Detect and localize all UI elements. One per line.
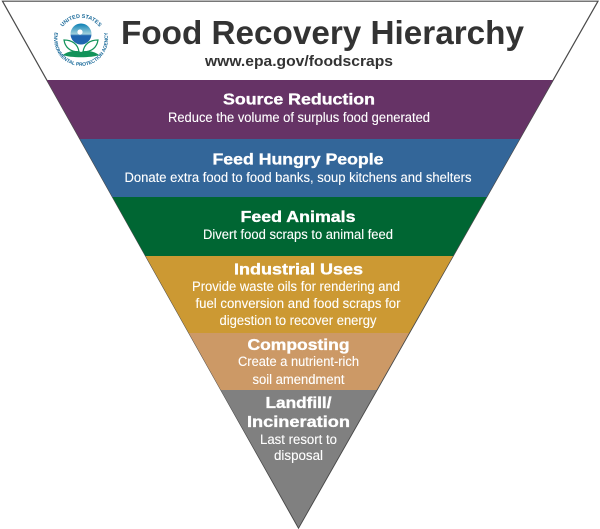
panel: feed hungry people: [80, 139, 520, 197]
heading: landfill / incineration: [247, 395, 350, 431]
icon: EPA seal: UNITED STATES: [60, 14, 102, 26]
panel: landfill / incineration: [221, 390, 377, 527]
heading: feed animals: Feed Animals: [240, 209, 356, 226]
text: landfill description: [260, 432, 337, 463]
heading: source reduction: Source Reduction: [223, 92, 375, 108]
text: composting description: [238, 354, 359, 387]
icon: EPA seal: ENVIRONMENTAL PROTECTION AGENCY: [54, 32, 108, 66]
text: industrial uses description: Provide waste oils for rendering and: [192, 279, 400, 294]
text: industrial uses description: [192, 279, 401, 328]
website url: www.epa.gov/foodscraps: [204, 53, 393, 70]
heading: industrial uses: Industrial Uses: [234, 262, 363, 278]
panel: source reduction: [47, 80, 553, 139]
text: feed hungry people description: Donate extra food to food banks, soup kitchens and shelters: [124, 170, 472, 185]
heading: composting: Composting: [248, 337, 350, 354]
text: industrial uses description: fuel conversion and food scraps for: [196, 296, 401, 311]
panel: feed animals: [112, 197, 487, 256]
title: Food Recovery Hierarchy: [121, 14, 525, 51]
text: landfill description: disposal: [274, 448, 323, 463]
text: industrial uses description: digestion to recover energy: [220, 313, 377, 328]
heading: landfill / incineration: Incineration: [247, 414, 350, 431]
text: composting description: soil amendment: [252, 372, 345, 387]
icon: EPA seal: [54, 14, 108, 66]
text: composting description: Create a nutrient-rich: [238, 354, 359, 369]
panel: composting: [189, 333, 409, 390]
text: landfill description: Last resort to: [260, 432, 337, 447]
panel: industrial uses: [146, 256, 453, 333]
heading: landfill / incineration: Landfill/: [266, 395, 332, 412]
text: source reduction description: Reduce the volume of surplus food generated: [168, 110, 430, 125]
text: feed animals description: Divert food scraps to animal feed: [203, 227, 393, 242]
heading: feed hungry people: Feed Hungry People: [212, 152, 384, 168]
